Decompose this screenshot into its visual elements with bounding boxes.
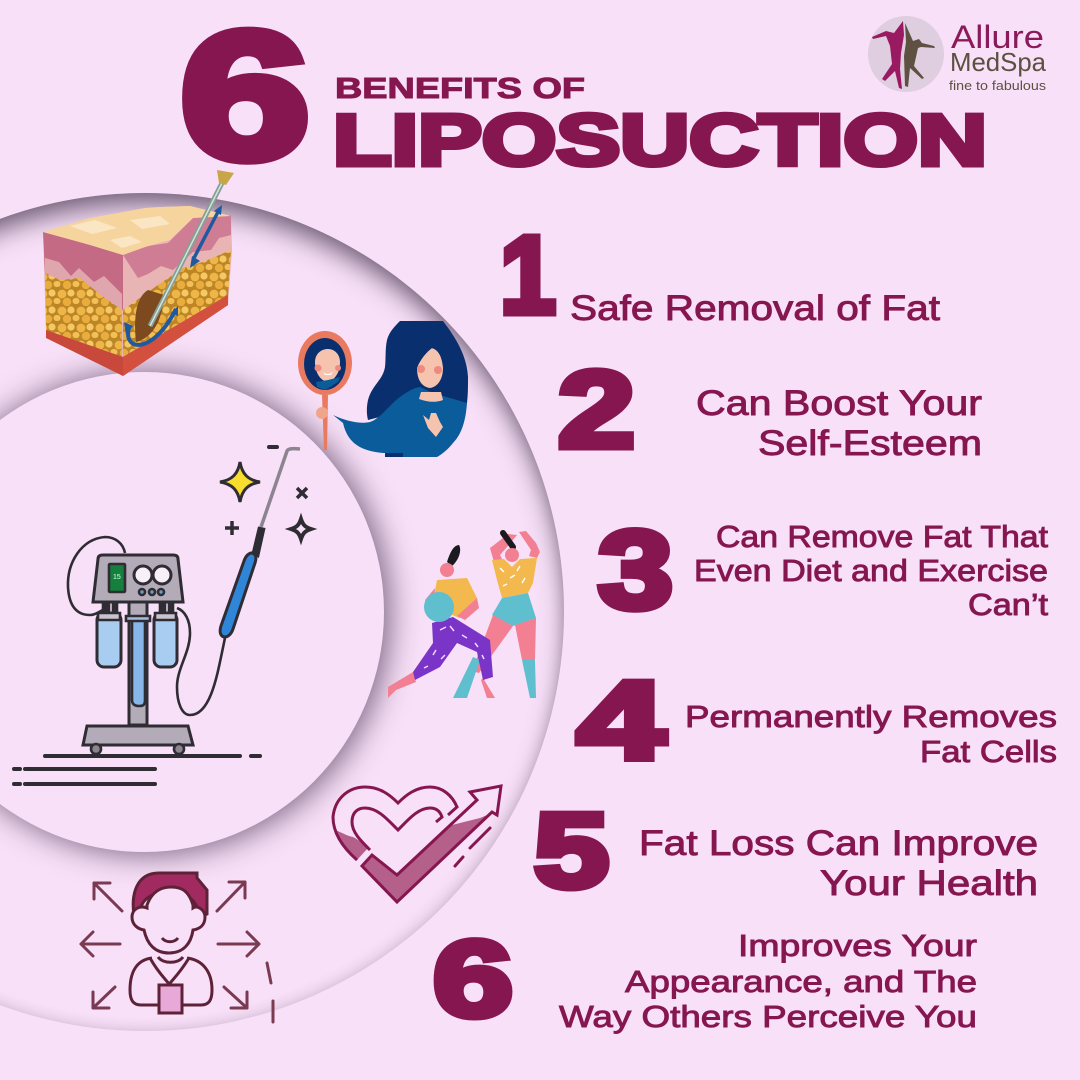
inner circle: [0, 372, 384, 852]
icon: woman with mirror: [298, 321, 468, 457]
item 3: Can Remove Fat That: [716, 519, 1048, 554]
logo: Allure MedSpa: fine to fabulous: [949, 78, 1047, 93]
item 5: [534, 792, 1038, 910]
title: big number 6: 6: [180, 0, 310, 197]
item 3: Can’t: [968, 587, 1048, 622]
item 1: Safe Removal of Fat: [570, 289, 940, 328]
heading: benefits of: BENEFITS OF: [335, 73, 585, 105]
item 5: 5: [534, 792, 609, 910]
item 5: Fat Loss Can Improve: [639, 824, 1038, 863]
icon: person with radiating arrows: [81, 873, 273, 1022]
item 6: Appearance, and The: [625, 964, 977, 999]
item 6: [433, 918, 977, 1039]
icon: liposuction machine: [14, 447, 311, 784]
item 4: 4: [577, 658, 665, 782]
icon: fitness women: [388, 531, 540, 698]
item 1: [500, 214, 940, 337]
heading: liposuction: LIPOSUCTION: [333, 101, 987, 181]
item 2: [558, 349, 982, 471]
item 1: 1: [500, 214, 556, 337]
icon: heart with arrow: [333, 786, 501, 902]
item 2: 2: [558, 349, 635, 471]
logo: Allure MedSpa: [868, 16, 1047, 93]
logo: Allure MedSpa: Allure: [951, 19, 1044, 55]
item 3: 3: [598, 508, 673, 632]
item 2: Self-Esteem: [758, 424, 982, 463]
icon: liposuction machine: 15: [113, 574, 121, 581]
icon: skin and fat cross-section with cannula: [43, 170, 234, 376]
item 6: Way Others Perceive You: [559, 999, 977, 1034]
item 2: Can Boost Your: [696, 384, 982, 423]
item 5: Your Health: [820, 864, 1038, 903]
item 6: Improves Your: [738, 928, 977, 963]
item 4: Permanently Removes: [685, 699, 1057, 734]
logo: Allure MedSpa: MedSpa: [950, 47, 1047, 77]
outer ring: [0, 193, 564, 1031]
item 3: [598, 508, 1048, 632]
item 4: Fat Cells: [920, 734, 1057, 769]
item 6: 6: [433, 918, 513, 1039]
item 3: Even Diet and Exercise: [694, 553, 1048, 588]
item 4: [577, 658, 1057, 782]
